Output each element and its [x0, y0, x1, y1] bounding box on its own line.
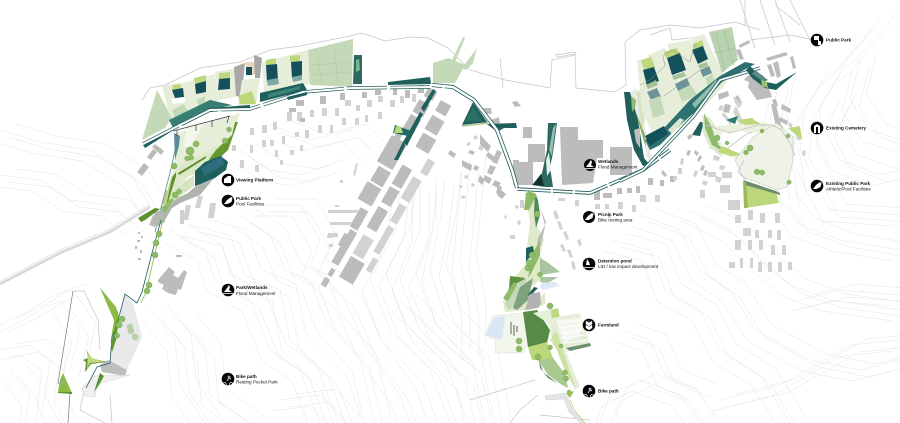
label: park wetlands [222, 284, 276, 296]
icon: wheat [586, 320, 592, 330]
icon: building [224, 176, 231, 183]
panel: central road [330, 37, 670, 282]
label: existing public park: Athletic/Pool Facilities [826, 186, 871, 192]
label: public park pool facilities [222, 195, 265, 207]
label: farmland: Farmland [598, 322, 619, 328]
label: existing public park [811, 180, 871, 192]
icon: wetland [585, 160, 595, 169]
label: park wetlands: Flood Management [236, 291, 276, 296]
label: detention pond [583, 258, 659, 270]
label: park wetlands: Park/Wetlands [236, 285, 268, 290]
icon: tree and figure [814, 36, 821, 45]
icon: gravestone [814, 124, 820, 133]
panel: central southern corridor and farmland [485, 190, 591, 423]
buildings: middle street [309, 83, 466, 304]
panel: east farmland and ponds [620, 27, 797, 181]
icon: bird [224, 197, 232, 204]
icon: bird [585, 213, 594, 220]
label: viewing platform [222, 174, 273, 186]
buildings: scattered houses west [135, 144, 191, 295]
label: bike path [583, 385, 619, 398]
label: public park north [811, 34, 851, 46]
panel: west corridor farmland and ponds [142, 39, 353, 140]
label: existing cemetery [811, 122, 867, 134]
label: existing public park: Existing Public Park [826, 181, 871, 186]
icon: cyclist [584, 388, 594, 398]
label: picnic park: Bike resting area [598, 218, 633, 222]
label: viewing platform: Viewing Platform [236, 178, 273, 182]
highway [0, 204, 150, 284]
label: public park north: Public Park [826, 38, 851, 42]
icon: bird [813, 182, 822, 189]
buildings: east district [673, 40, 806, 272]
label: picnic park [583, 211, 633, 223]
label: public park pool facilities: Public Park [236, 196, 261, 201]
label: detention pond: LID / low impact development [598, 264, 659, 269]
label: bike path resting pocket park [222, 373, 278, 386]
small houses west of the middle street [327, 163, 358, 247]
label: detention pond: Detention pond [598, 258, 632, 264]
label: bike path resting pocket park: Resting Pocket Park [236, 380, 278, 384]
label: wetlands flood management: Flood Management [598, 164, 638, 170]
icon: drop and waves [584, 259, 594, 268]
label: wetlands flood management: Wetlands [598, 159, 619, 164]
label: picnic park: Picnic Park [598, 212, 623, 217]
buildings: central blocks [448, 101, 675, 270]
label: bike path resting pocket park: Bike path [236, 374, 257, 379]
label: bike path: Bike path [598, 388, 619, 394]
icon: wetland [223, 285, 233, 294]
panel: park wetlands and bike path west [58, 220, 163, 397]
panel: west road with planted edge [143, 55, 431, 148]
label: public park pool facilities: Pool Facilities [236, 202, 265, 206]
label: existing cemetery: Existing Cemetery [826, 126, 867, 130]
panel: east wetland strip [624, 88, 652, 166]
label: farmland [583, 319, 619, 331]
panel: viewing platform public park [138, 113, 240, 232]
panel: existing cemetery and public park [702, 113, 802, 208]
icon: cyclist [223, 376, 233, 386]
label: wetlands flood management [584, 159, 638, 171]
